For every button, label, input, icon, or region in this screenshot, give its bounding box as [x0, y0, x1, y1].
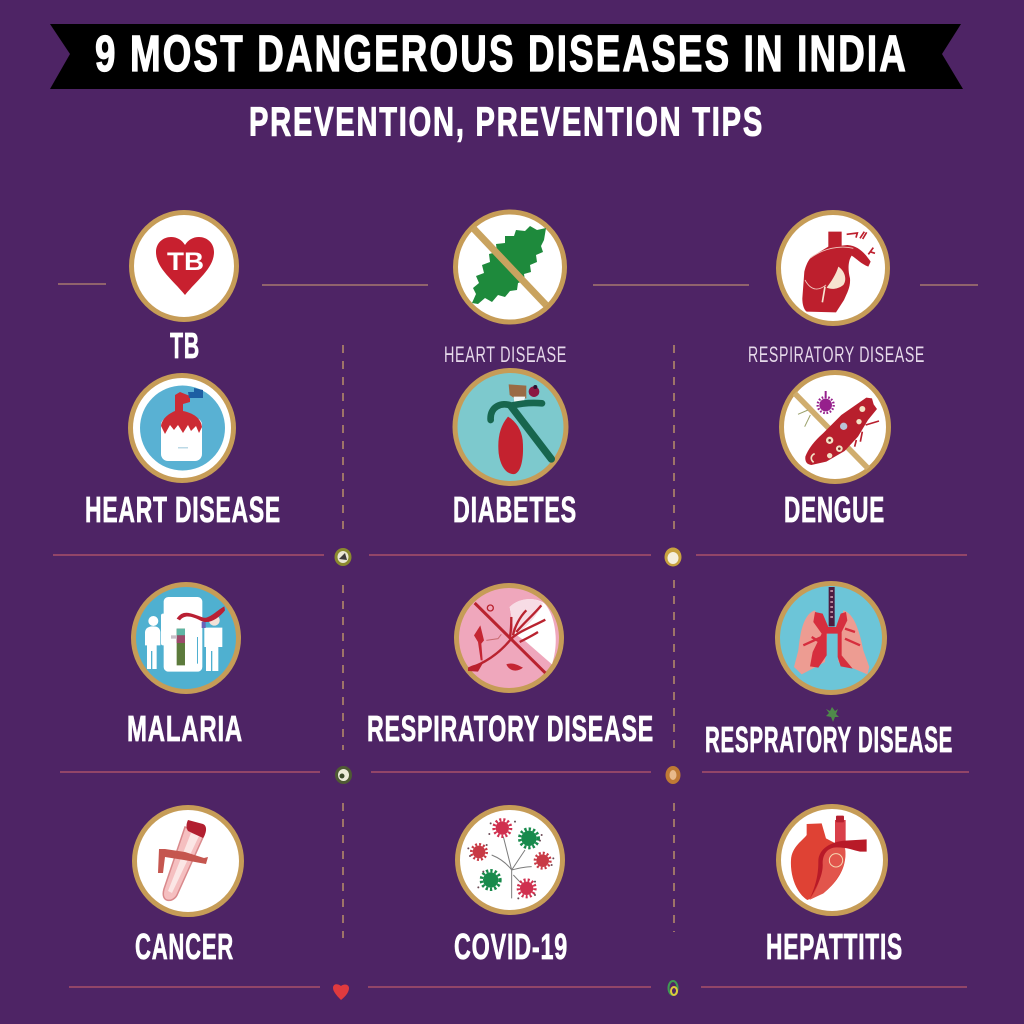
icon: bottle	[130, 376, 234, 480]
icon: small plant	[826, 707, 839, 722]
label: cancer: CANCER	[135, 926, 234, 967]
icon: small red heart	[333, 984, 349, 1000]
label: hepatitis misspelled: HEPATTITIS	[766, 926, 903, 967]
label: malaria: MALARIA	[127, 708, 243, 749]
panel: respiratory disease	[367, 586, 654, 749]
icon: red heart anatomy	[778, 212, 888, 324]
label: diabetes: DIABETES	[453, 489, 577, 530]
panel: hepatitis	[766, 806, 903, 967]
icon: diabetes	[455, 370, 566, 484]
subtitle: PREVENTION, PREVENTION TIPS	[249, 98, 764, 144]
icon: TB heart	[132, 212, 236, 320]
icon: test tube	[134, 808, 242, 914]
small heading: respiratory disease: RESPIRATORY DISEASE	[748, 342, 925, 367]
icon: small green knot	[668, 981, 678, 995]
panel: respiratory disease 2	[705, 584, 953, 760]
panel: leaf	[444, 212, 567, 367]
icon: small divider badge 2	[664, 548, 682, 566]
panel: malaria	[127, 584, 243, 749]
label: dengue: DENGUE	[784, 489, 885, 530]
icon: crossed parasite	[782, 372, 888, 482]
panel: diabetes	[453, 370, 577, 530]
icon: virus cluster	[458, 808, 562, 912]
icon: red organ	[778, 806, 886, 914]
panel: covid-19	[454, 808, 568, 967]
label: covid-19: COVID-19	[454, 926, 568, 967]
label: heart disease: HEART DISEASE	[85, 489, 281, 530]
icon: crossed leaf	[456, 212, 564, 322]
icon: lungs	[778, 584, 884, 692]
icon: small divider badge 4	[666, 766, 680, 784]
panel: heart disease	[85, 376, 281, 530]
panel: TB	[132, 212, 236, 366]
panel: dengue	[782, 372, 888, 530]
icon: crossed bronchi	[456, 586, 562, 690]
panel: cancer	[134, 808, 242, 967]
small heading: heart disease: HEART DISEASE	[444, 342, 567, 367]
label: respiratory disease: RESPIRATORY DISEASE	[367, 708, 654, 749]
icon: small divider badge 1	[334, 548, 352, 566]
icon: people and blood	[134, 584, 238, 692]
icon: small divider badge 3	[335, 766, 352, 784]
label: TB: TB	[170, 325, 200, 366]
panel: heart	[748, 212, 925, 367]
icon: TB heart: TB	[167, 248, 204, 276]
